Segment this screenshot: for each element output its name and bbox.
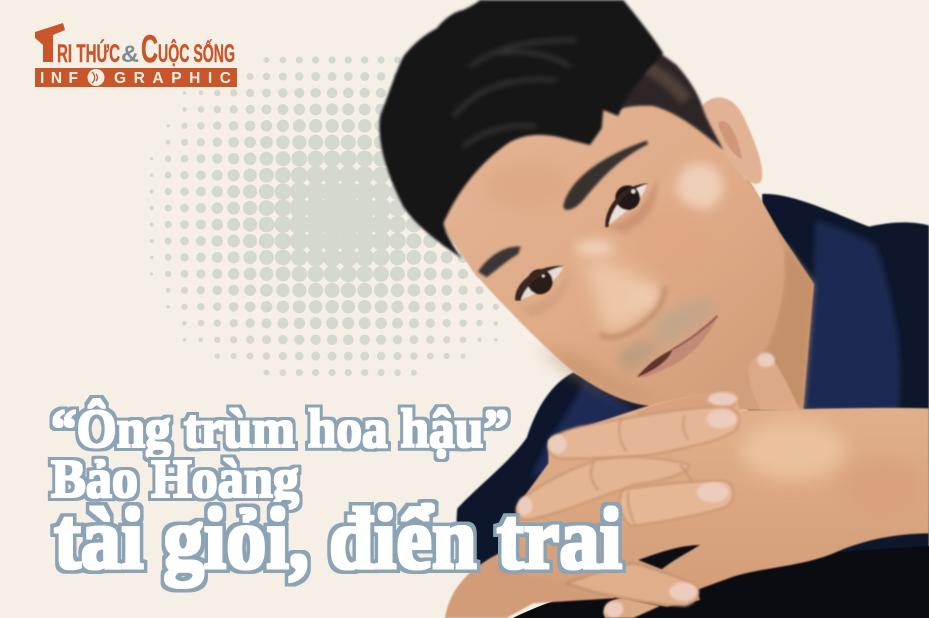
main hair [379, 0, 663, 258]
right eyebrow [563, 141, 648, 210]
title line 3: tài giỏi, điển trai [54, 491, 622, 588]
fourth finger [620, 481, 733, 526]
logo banner [35, 68, 237, 87]
hair [379, 0, 723, 258]
finger nails [518, 353, 775, 617]
title [51, 398, 622, 588]
bottom finger [603, 598, 660, 618]
logo ampersand: & [121, 41, 139, 68]
title line 2: Bảo Hoàng [51, 448, 299, 509]
black gap between fingers [638, 545, 700, 569]
portrait photo of Bảo Hoàng [379, 0, 929, 618]
left forearm [445, 547, 633, 618]
hand highlight [740, 420, 847, 480]
nose tip highlight [630, 287, 657, 307]
cheek tone [633, 207, 713, 273]
lips [637, 316, 717, 377]
logo banner text: INF [40, 70, 78, 87]
logo banner text end: GRAPHIC [114, 70, 231, 87]
third finger [516, 457, 690, 520]
nose body highlight [583, 262, 660, 333]
wrist tone [840, 457, 927, 523]
logo: Tri thức & Cuộc sống Infographic [35, 23, 237, 87]
side hair brown sheen [630, 60, 687, 100]
hair shine [453, 40, 577, 147]
forehead tone [483, 163, 570, 210]
chin stubble [617, 341, 660, 373]
lower finger [567, 563, 699, 606]
facial features [478, 141, 723, 403]
hands [445, 353, 929, 618]
nose bridge highlight [575, 240, 615, 257]
logo O icon [88, 69, 104, 86]
torso layers [441, 95, 929, 618]
nose lower shadow [600, 287, 665, 337]
hand silhouette [517, 392, 929, 607]
eye socket shadows [607, 177, 657, 233]
left eyebrow [478, 247, 521, 277]
jacket [457, 194, 929, 572]
logo wordmark second: UỘC SỐNG [158, 38, 235, 68]
logo big C: C [141, 28, 158, 71]
logo wordmark: RI THỨC [57, 38, 120, 68]
left eye [515, 266, 564, 301]
right eye [605, 183, 649, 227]
raised thumb [748, 355, 800, 411]
neck [620, 177, 814, 410]
neck shadow [748, 244, 814, 410]
jaw shadow lower [540, 347, 660, 403]
second finger [548, 407, 739, 458]
title line 1: “Ông trùm hoa hậu” [51, 398, 509, 459]
black chair back [513, 546, 929, 618]
knuckle creases [591, 415, 692, 525]
top finger [637, 392, 737, 417]
halftone dot circle [150, 57, 530, 376]
cheek highlight [677, 163, 723, 210]
face shape [441, 95, 784, 406]
ear [700, 97, 762, 184]
logo T mark [35, 23, 65, 62]
stubble [650, 299, 717, 347]
faded side hair [610, 30, 723, 150]
